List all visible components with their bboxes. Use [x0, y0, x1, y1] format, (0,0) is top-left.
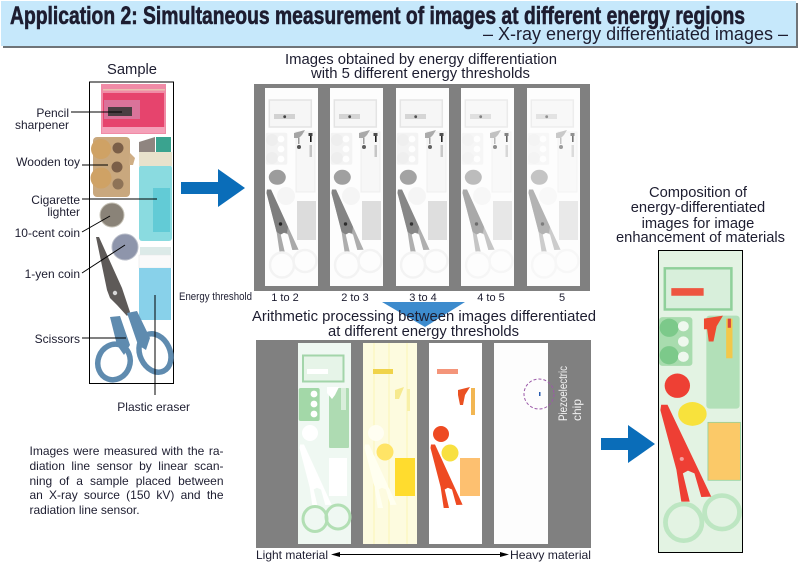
- leader lines: [71, 112, 157, 395]
- energy threshold labels: Energy threshold: [179, 291, 252, 303]
- light to heavy axis: Light material: [256, 548, 328, 562]
- energy threshold labels: [179, 291, 565, 304]
- heading: composition: enhancement of materials: [616, 230, 785, 246]
- light to heavy axis: Heavy material: [510, 548, 591, 562]
- arrow: down to arithmetic processing: [382, 302, 465, 327]
- callout labels for sample: Pencil: [36, 106, 69, 120]
- energy threshold labels: 1 to 2: [271, 292, 299, 304]
- energy threshold labels: 2 to 3: [341, 292, 369, 304]
- description text: [30, 444, 224, 517]
- panel: five threshold x-ray images: [254, 84, 590, 291]
- energy threshold labels: 5: [559, 292, 565, 304]
- pencil sharpener: [101, 84, 166, 134]
- description text: an X-ray source (150 kV) and the: [30, 488, 224, 502]
- callout labels for sample: 1-yen coin: [25, 267, 80, 281]
- description text: radiation line sensor.: [30, 503, 140, 517]
- 1-yen coin: [112, 234, 138, 260]
- piezoelectric label: chip: [570, 399, 584, 421]
- heading: composition: [616, 185, 785, 246]
- wooden toy: [90, 137, 135, 197]
- panel: arithmetic processed images: [256, 340, 591, 548]
- header banner: [1, 1, 798, 48]
- plastic eraser: [139, 247, 171, 320]
- description text: ning of a sample placed between: [30, 474, 224, 488]
- callout labels for sample: sharpener: [15, 118, 69, 132]
- heading: arithmetic processing: at different energy thresholds: [328, 324, 519, 340]
- light to heavy axis: [256, 548, 591, 562]
- heading: arithmetic processing: Arithmetic processing between images differentiated: [252, 309, 596, 325]
- heading: composition: Composition of: [649, 185, 748, 201]
- callout labels for sample: [15, 106, 190, 414]
- 10-cent coin: [100, 203, 124, 227]
- callout labels for sample: Scissors: [35, 332, 80, 346]
- energy threshold labels: 4 to 5: [477, 292, 505, 304]
- description text: diation line sensor by linear scan-: [30, 459, 224, 473]
- subtitle: – X-ray energy differentiated images –: [483, 24, 788, 44]
- panel: composite image: [658, 250, 742, 552]
- piezoelectric label: [556, 366, 584, 421]
- heading: energy differentiation images: with 5 different energy thresholds: [310, 66, 530, 82]
- cigarette lighter: [139, 137, 172, 241]
- scissors: [93, 237, 177, 384]
- callout labels for sample: Plastic eraser: [117, 400, 190, 414]
- callout labels for sample: Cigarette: [31, 193, 80, 207]
- sample heading: Sample: [107, 62, 157, 78]
- piezoelectric label: Piezoelectric: [556, 366, 570, 421]
- chip mark: [539, 392, 540, 396]
- callout labels for sample: 10-cent coin: [15, 226, 80, 240]
- strip: light material green: [298, 343, 351, 544]
- heading: composition: images for image: [642, 216, 754, 232]
- strip: yellow: [363, 343, 417, 544]
- strip: piezoelectric chip: [494, 343, 554, 544]
- heading: energy differentiation images: Images obtained by energy differentiation: [285, 52, 557, 68]
- arrow: sample to images: [181, 169, 245, 207]
- heading: energy differentiation images: [285, 52, 557, 82]
- panel: sample photo: [90, 82, 177, 384]
- dashed circle marker: [524, 379, 554, 409]
- description text: Images were measured with the ra-: [30, 444, 224, 458]
- heading: arithmetic processing: [252, 309, 596, 340]
- callout labels for sample: Wooden toy: [16, 155, 80, 169]
- arrow: to composition: [601, 425, 655, 463]
- heading: composition: energy-differentiated: [631, 200, 765, 216]
- energy threshold labels: 3 to 4: [409, 292, 437, 304]
- callout labels for sample: lighter: [47, 205, 80, 219]
- strip: heavy red: [429, 343, 482, 544]
